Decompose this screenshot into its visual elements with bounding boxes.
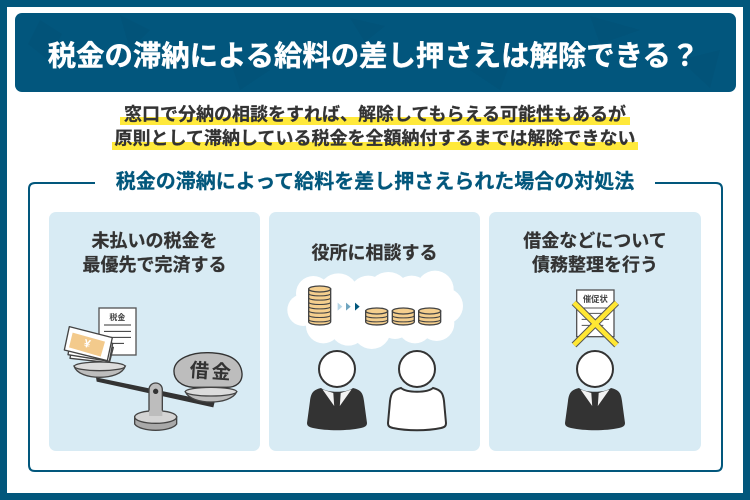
large coin stack (309, 286, 331, 325)
right pan (185, 387, 237, 402)
icon: crossed-out demand letter (574, 290, 617, 345)
panel heading 1: 未払いの税金を (92, 231, 218, 251)
summary text with highlights: 原則として滞納している税金を全額納付するまでは解除できない (115, 128, 635, 148)
icon: person in suit (565, 351, 625, 430)
panel heading 3: 債務整理を行う (532, 255, 658, 275)
panel heading 2: 役所に相談する (312, 243, 438, 263)
icon: banknotes: ¥ (83, 338, 92, 351)
summary text with highlights (112, 104, 638, 150)
debt weight: 借金 (189, 360, 234, 385)
panel heading 1 (82, 231, 226, 275)
cloud (287, 271, 463, 349)
icon: tax document: 税金 (109, 312, 125, 322)
title banner (15, 13, 736, 92)
panel heading 3: 借金などについて (523, 231, 667, 251)
left pan (74, 362, 125, 377)
icon: banknotes (64, 327, 113, 363)
icon: taxpayer (388, 351, 446, 430)
panel: pay taxes first (49, 212, 260, 451)
illustration: thought cloud with coins (287, 271, 463, 349)
beam (96, 377, 215, 407)
small coin stack 2 (392, 308, 414, 325)
small coin stack 3 (419, 308, 441, 325)
summary text with highlights: 窓口で分納の相談をすれば、解除してもらえる可能性もあるが (124, 104, 626, 124)
frame: coping methods (29, 183, 722, 471)
icon: officer in suit (307, 351, 367, 430)
panel heading 3 (523, 231, 667, 275)
panel: consult the office (269, 212, 480, 451)
icon: crossed-out demand letter: 催促状 (583, 294, 608, 304)
title banner: 税金の滞納による給料の差し押さえは解除できる？ (48, 40, 699, 72)
icon: balance scale (64, 308, 242, 430)
process arrows (338, 303, 360, 311)
panel: debt restructuring (489, 212, 701, 451)
small coin stack 1 (366, 308, 388, 325)
section heading: 税金の滞納によって給料を差し押さえられた場合の対処法 (116, 170, 634, 193)
debt weight (174, 353, 242, 387)
stand (135, 383, 177, 430)
panel heading 1: 最優先で完済する (82, 255, 226, 275)
icon: tax document (99, 308, 136, 355)
